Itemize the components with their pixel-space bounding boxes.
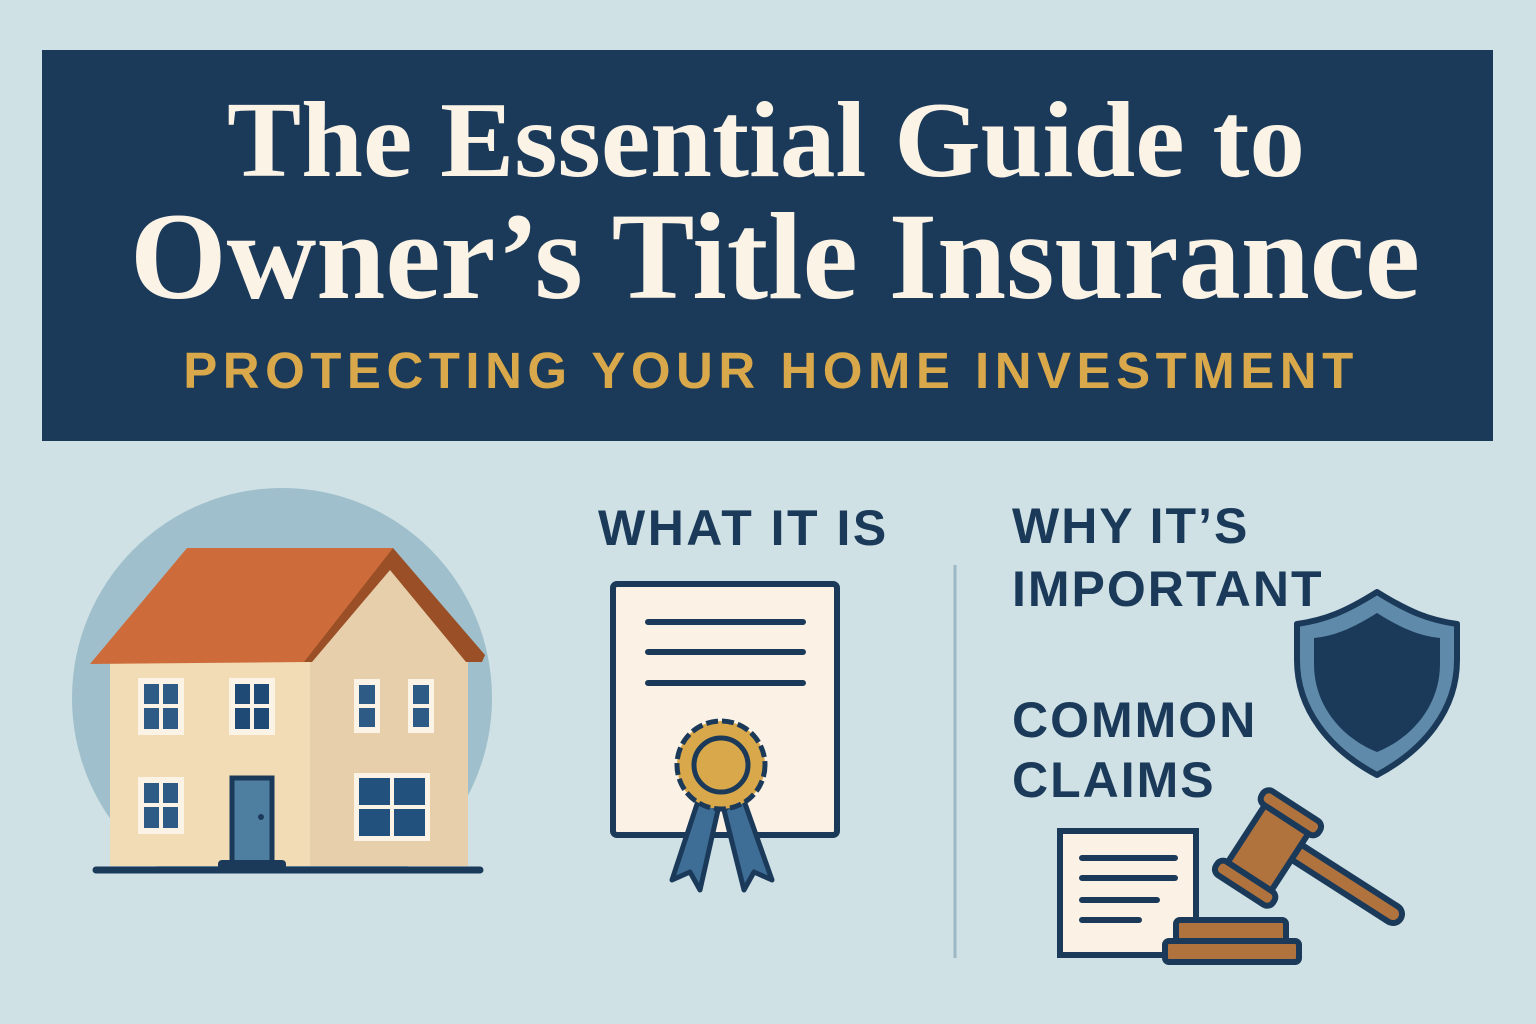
title banner — [42, 50, 1493, 441]
heading: common claims — [1012, 692, 1257, 808]
heading: why it's important — [1012, 498, 1323, 617]
divider — [954, 565, 956, 958]
title: The Essential Guide to — [227, 81, 1305, 200]
heading: why it's important: WHY IT’S — [1012, 498, 1249, 554]
title — [130, 81, 1420, 325]
icon: certificate — [613, 584, 837, 890]
heading: why it's important: IMPORTANT — [1012, 561, 1323, 617]
heading: common claims: COMMON — [1012, 692, 1257, 748]
icon: shield — [1297, 592, 1457, 775]
subtitle: PROTECTING YOUR HOME INVESTMENT — [183, 342, 1359, 399]
icon: house — [72, 488, 492, 908]
title: Owner’s Title Insurance — [130, 188, 1420, 325]
heading: common claims: CLAIMS — [1012, 752, 1216, 808]
icon: document and gavel — [1060, 788, 1393, 962]
heading: what it is: WHAT IT IS — [598, 500, 889, 556]
